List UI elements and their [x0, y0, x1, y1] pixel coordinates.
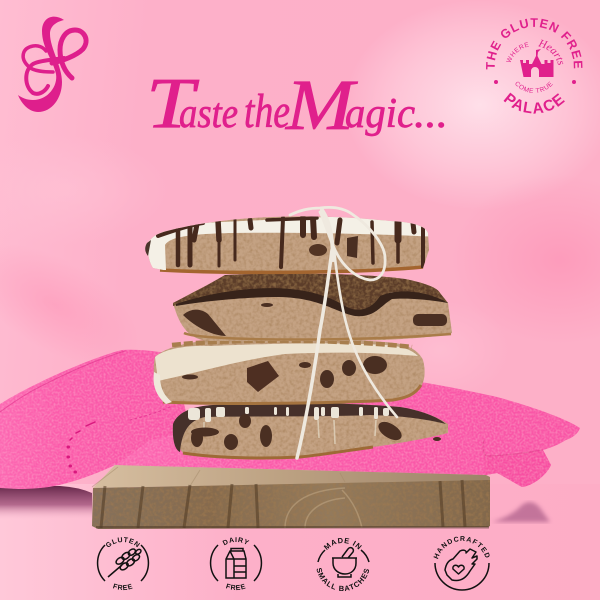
title: T: [146, 63, 200, 143]
icon: handcrafted: [434, 536, 490, 591]
badge: the gluten free palace: Hearts: [538, 40, 564, 65]
badge: the gluten free palace: [486, 18, 582, 114]
cookie 1 top: [140, 212, 440, 273]
table shadows: [0, 486, 550, 522]
icon: hand with heart: [445, 549, 477, 581]
icon: handcrafted: HANDCRAFTED: [434, 536, 490, 559]
icon: made in small batches: SMALL BATCHES: [316, 568, 369, 592]
icon: castle: [520, 49, 554, 77]
icon: gluten free: [96, 537, 150, 590]
cookie 3: [154, 339, 425, 404]
title: ...: [414, 91, 448, 137]
twine: [290, 207, 397, 458]
cookie 2: [173, 274, 452, 341]
cookie 4 bottom: [173, 403, 448, 458]
title: [146, 63, 448, 145]
logo: bow: [18, 17, 86, 112]
badge: the gluten free palace: PALACE: [504, 92, 565, 114]
badge: the gluten free palace: COME TRUE: [516, 82, 553, 93]
icon: dairy free: FREE: [226, 584, 246, 590]
icon: made in small batches: [316, 538, 370, 592]
icon: gluten free: GLUTEN: [106, 537, 140, 548]
badge: the gluten free palace: THE GLUTEN FREE: [486, 18, 582, 70]
icon: wheat: [108, 545, 145, 577]
napkin: [0, 350, 580, 489]
napkin hem stitching: [0, 351, 170, 472]
badge: the gluten free palace: WHERE: [506, 42, 529, 62]
wood board: [92, 465, 490, 529]
title: agic: [345, 91, 415, 137]
title: M: [285, 65, 359, 145]
icon: dairy free: [210, 537, 262, 590]
title: the: [244, 85, 290, 138]
icon: mortar and pestle: [332, 548, 357, 577]
icon: milk carton: [226, 548, 246, 578]
icon: made in small batches: MADE IN: [324, 538, 362, 550]
title: aste: [179, 91, 238, 137]
icon: dairy free: DAIRY: [222, 537, 250, 546]
icon: gluten free: FREE: [113, 584, 132, 590]
